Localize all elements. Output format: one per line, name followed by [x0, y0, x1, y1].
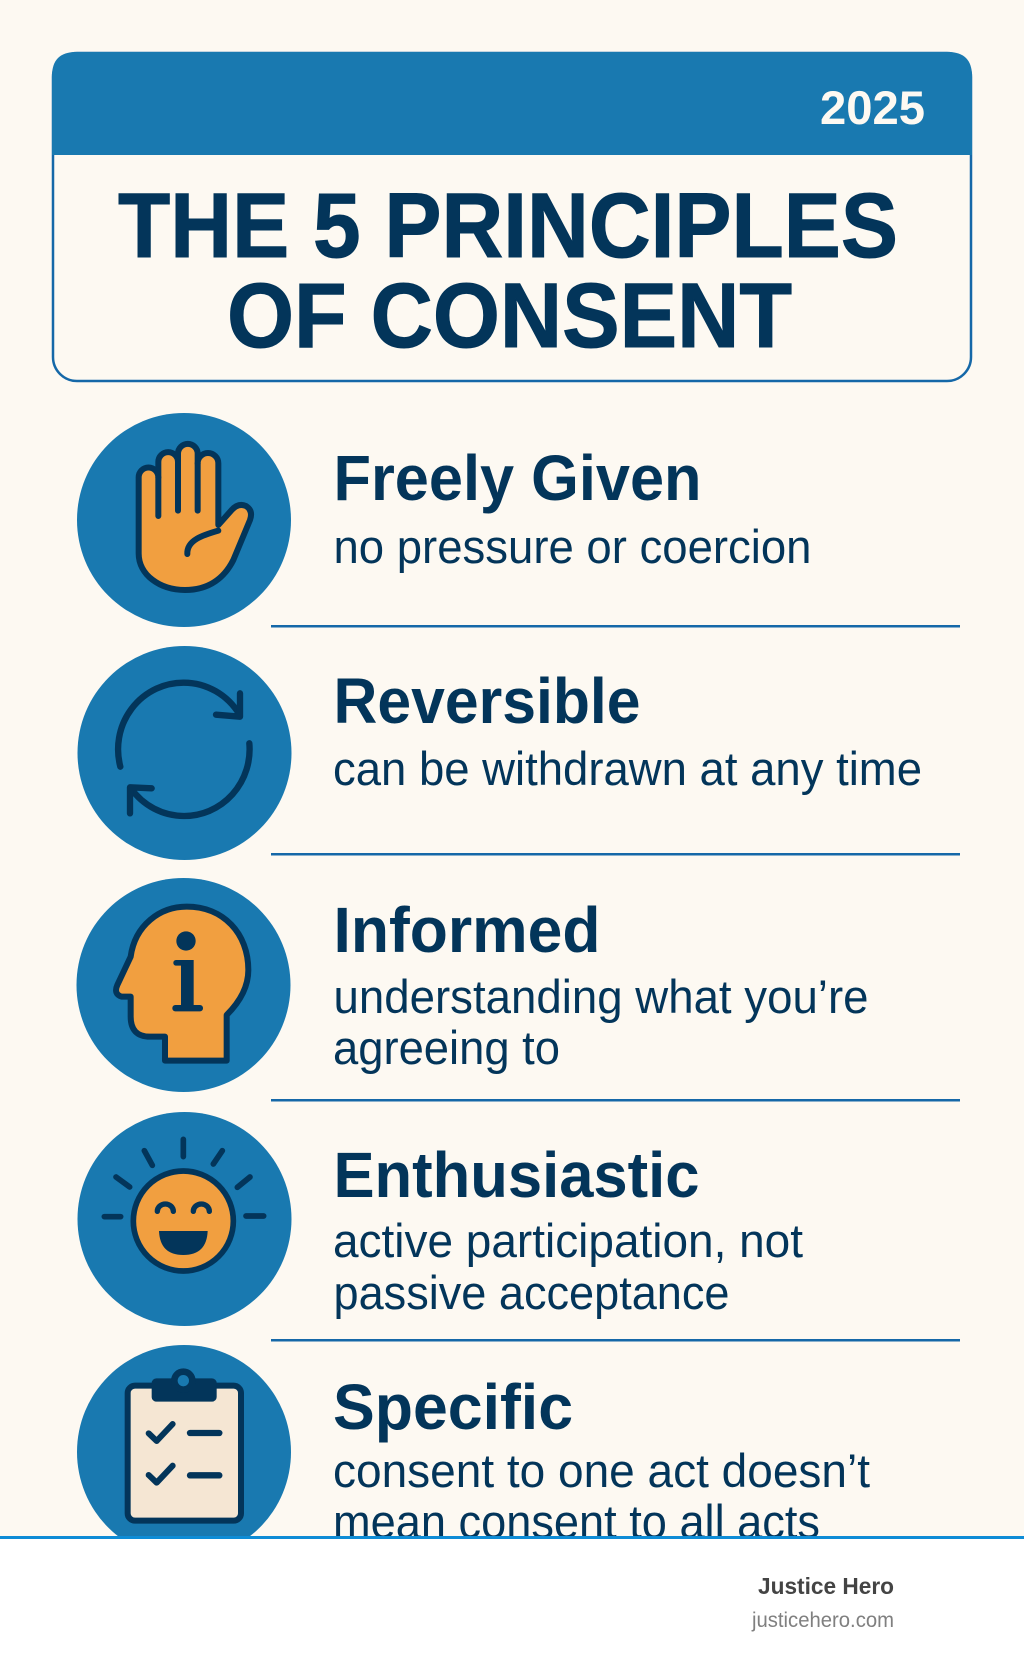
description — [333, 1444, 870, 1548]
principle 3: informed — [76, 878, 868, 1092]
description: mean consent to all acts — [333, 1495, 820, 1548]
icon: clipboard checklist — [77, 1345, 291, 1559]
description — [333, 1214, 803, 1319]
icon: circular arrows — [78, 646, 292, 860]
icon: smiling sun — [78, 1112, 292, 1326]
divider lines — [271, 625, 960, 1342]
icon: head with info symbol — [76, 878, 290, 1092]
website: justicehero.com — [751, 1609, 894, 1632]
title: THE 5 PRINCIPLES — [118, 175, 898, 277]
description: active participation, not — [333, 1214, 803, 1267]
description: passive acceptance — [334, 1266, 730, 1319]
principle 1: freely given — [77, 413, 812, 627]
title — [118, 175, 898, 367]
header band — [52, 52, 972, 155]
heading: Informed — [334, 894, 600, 966]
description: consent to one act doesn’t — [333, 1444, 870, 1497]
description: understanding what you’re — [334, 970, 868, 1023]
principle 2: reversible — [78, 646, 922, 860]
description: can be withdrawn at any time — [333, 742, 922, 795]
brand name: Justice Hero — [758, 1573, 894, 1599]
description — [333, 970, 868, 1074]
principle 5: specific — [77, 1345, 870, 1559]
year: 2025 — [820, 81, 925, 134]
heading: Enthusiastic — [334, 1139, 700, 1211]
heading: Reversible — [334, 665, 640, 737]
heading: Freely Given — [334, 442, 702, 514]
description: agreeing to — [333, 1021, 560, 1074]
title: OF CONSENT — [227, 265, 792, 367]
header panel — [52, 52, 972, 381]
principle 4: enthusiastic — [78, 1112, 803, 1326]
footer — [0, 1536, 1024, 1666]
heading: Specific — [333, 1371, 573, 1443]
description: no pressure or coercion — [334, 520, 812, 573]
icon: raised hand — [77, 413, 291, 627]
